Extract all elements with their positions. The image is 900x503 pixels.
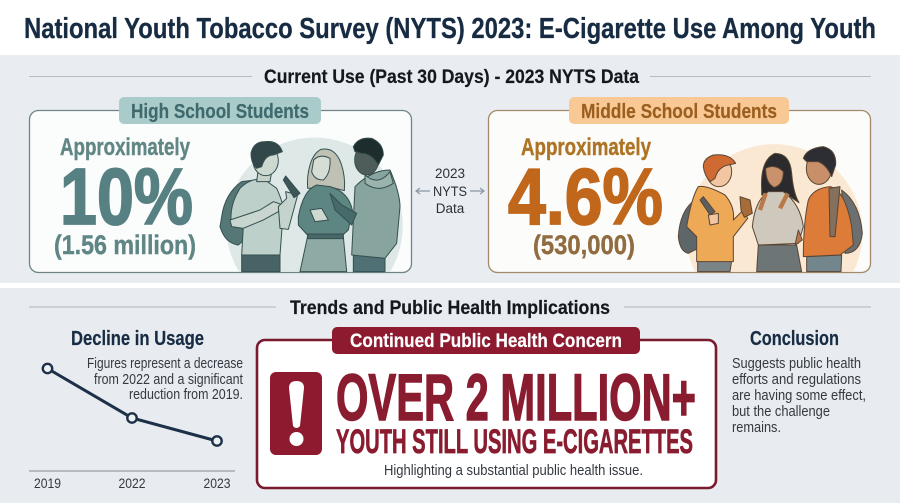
line chart: 2019 to 2023 decline <box>29 364 235 491</box>
stat: approximately 10 percent: 10% <box>60 152 193 241</box>
label: 2023 NYTS data with arrows: Data <box>436 201 465 216</box>
tag: high school students: High School Students <box>131 101 309 123</box>
text: conclusion body: are having some effect, <box>732 388 866 404</box>
text: decline description <box>87 356 243 403</box>
panel: middle school students <box>488 97 870 272</box>
illustration: high school group <box>220 137 403 272</box>
text: decline description: Figures represent a decrease <box>87 356 243 372</box>
text: conclusion body: but the challenge <box>732 404 830 420</box>
heading: trends and implications: Trends and Public Health Implications <box>290 298 610 319</box>
icon: exclamation mark <box>270 372 322 455</box>
text: decline description: from 2022 and a significant <box>94 372 243 388</box>
stat: approximately 4.6 percent: Approximately <box>521 134 652 161</box>
stat: approximately 10 percent: (1.56 million) <box>54 230 196 260</box>
panel: conclusion <box>732 328 866 436</box>
panel: decline in usage <box>29 328 243 491</box>
text: conclusion body: remains. <box>732 420 781 436</box>
line chart: 2019 to 2023 decline: 2019 <box>34 475 61 491</box>
stat: approximately 4.6 percent <box>508 134 663 260</box>
label: 2023 NYTS data with arrows: 2023 <box>435 166 465 181</box>
tag: continued public health concern: Continued Public Health Concern <box>350 330 622 352</box>
line chart: 2019 to 2023 decline: 2023 <box>204 475 231 491</box>
stat: approximately 4.6 percent: (530,000) <box>533 230 635 260</box>
tag: middle school students: Middle School Students <box>581 101 777 123</box>
stat: over 2 million: OVER 2 MILLION+ <box>336 360 696 434</box>
text: conclusion body <box>732 356 866 436</box>
label: 2023 NYTS data with arrows: NYTS <box>433 184 467 199</box>
heading: current use: Current Use (Past 30 Days) - 2023 NYTS Data <box>264 67 639 88</box>
text: highlighting issue: Highlighting a substantial public health issue. <box>384 463 643 479</box>
line chart: 2019 to 2023 decline: 2022 <box>118 475 146 491</box>
label: 2023 NYTS data with arrows <box>416 166 484 216</box>
stat: approximately 10 percent <box>54 134 196 260</box>
illustration: middle school group <box>678 144 862 272</box>
stat: approximately 4.6 percent: 4.6% <box>508 152 663 241</box>
heading: decline in usage: Decline in Usage <box>71 328 204 350</box>
panel: high school students <box>30 97 412 272</box>
stat: approximately 10 percent: Approximately <box>60 134 191 161</box>
text: conclusion body: Suggests public health <box>732 356 861 372</box>
panel: continued public health concern <box>257 327 716 488</box>
text: decline description: reduction from 2019. <box>129 387 243 403</box>
text: conclusion body: efforts and regulations <box>732 372 861 388</box>
heading: conclusion: Conclusion <box>750 328 839 350</box>
